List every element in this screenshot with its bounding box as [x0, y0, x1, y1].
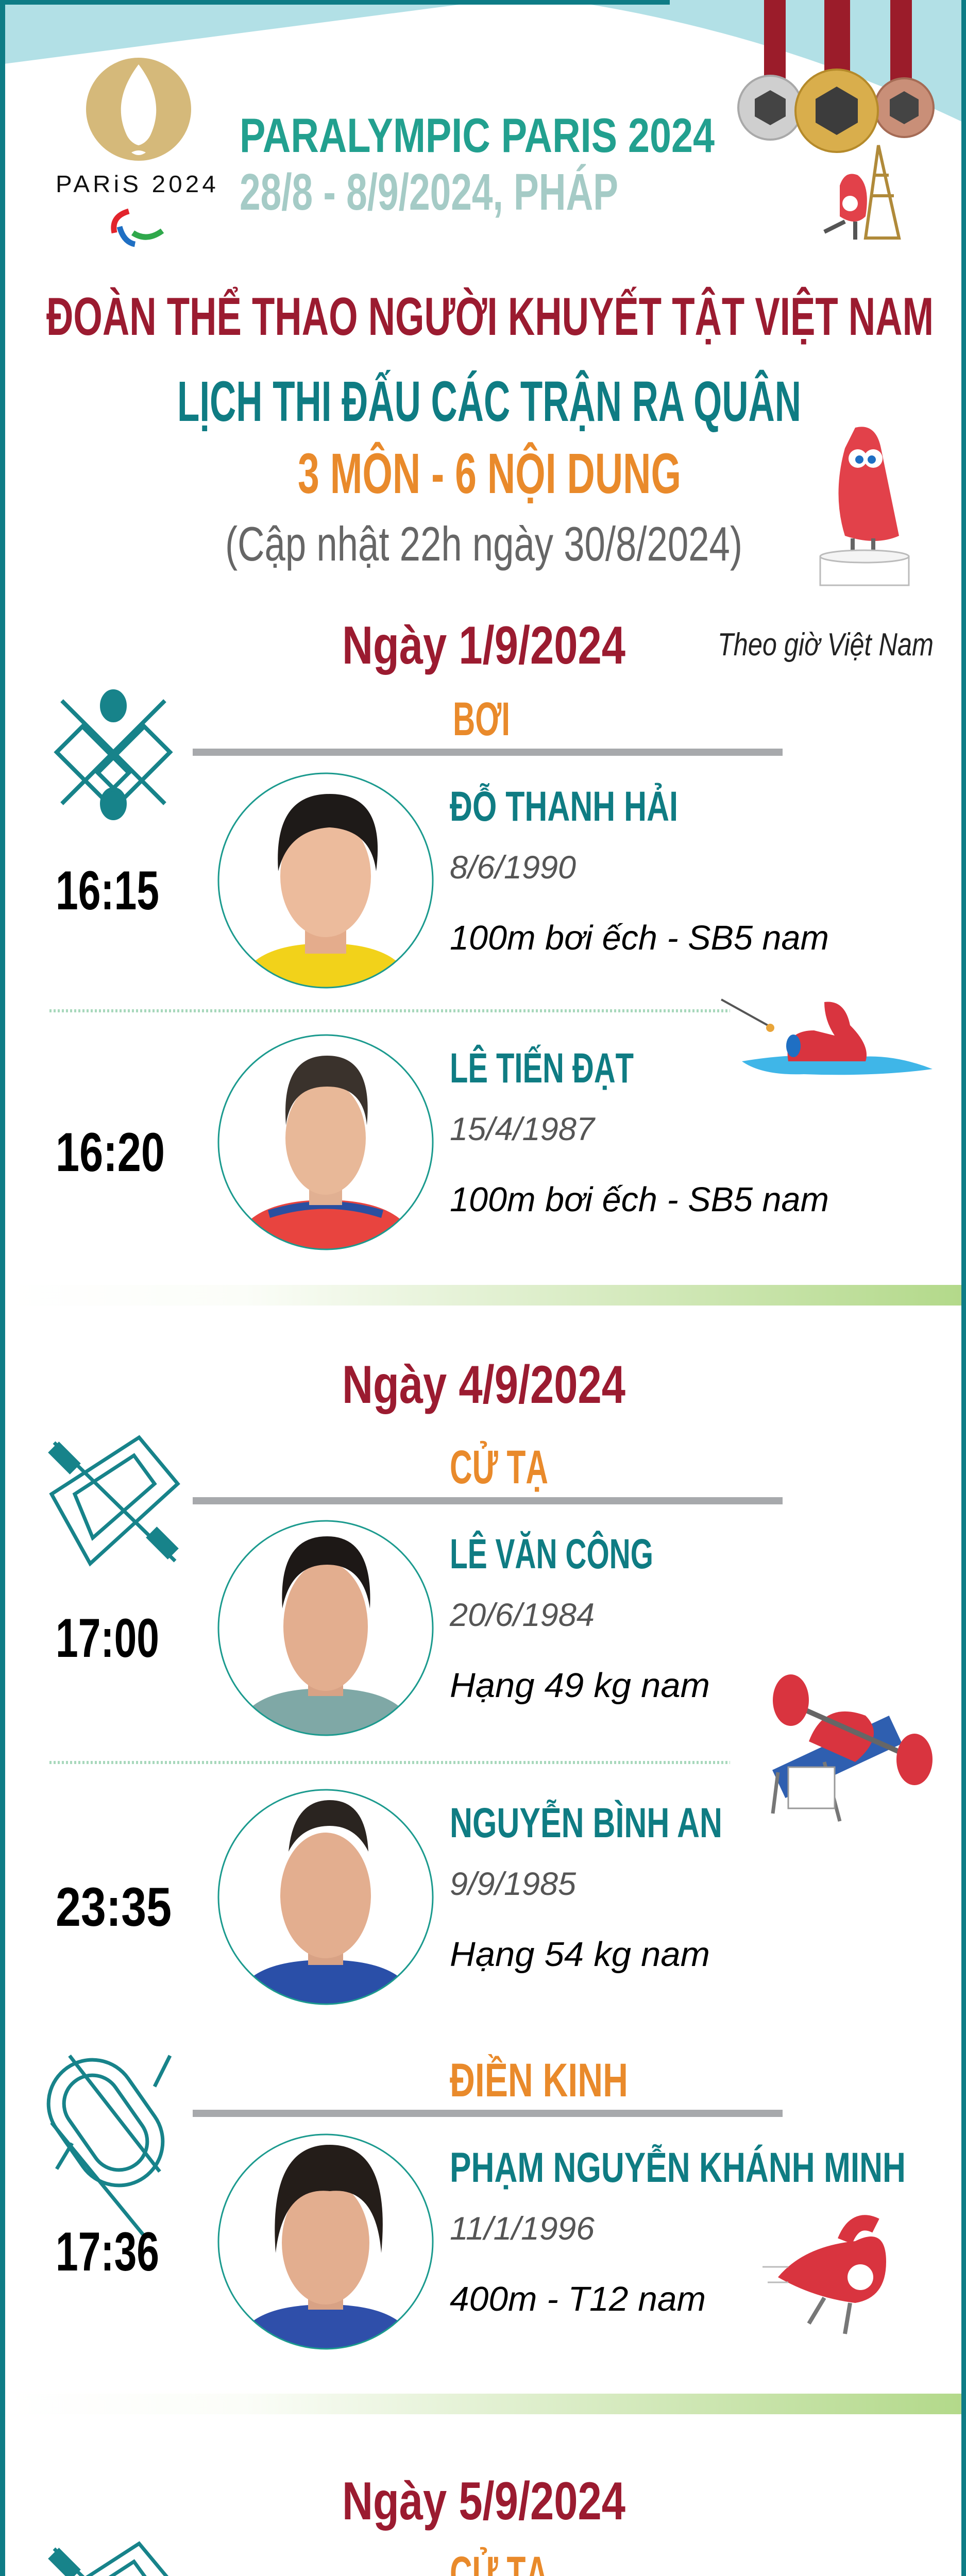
athlete: Le Tien Dat [56, 1035, 829, 1251]
sport: Dien kinh: ĐIỀN KINH [450, 2054, 628, 2107]
dates: 28/8 - 8/9/2024, PHÁP [240, 163, 618, 221]
icon: mascot on podium [820, 427, 909, 585]
athlete: Nguyen Binh An: NGUYỄN BÌNH AN [450, 1800, 722, 1846]
athlete: Pham Nguyen Khanh Minh: 400m - T12 nam [450, 2280, 706, 2318]
athlete: Le Tien Dat: 16:20 [56, 1121, 165, 1183]
athlete: Nguyen Binh An: 23:35 [56, 1876, 172, 1938]
athlete: Do Thanh Hai [56, 773, 829, 990]
athlete: Pham Nguyen Khanh Minh: 17:36 [56, 2221, 159, 2282]
athlete: Le Tien Dat: 15/4/1987 [450, 1111, 596, 1147]
icon: swimming mascot [721, 999, 933, 1075]
icon: athletics track [31, 2043, 180, 2236]
icon: weightlifting [48, 1437, 179, 1564]
subtitle: update time: (Cập nhật 22h ngày 30/8/2024) [225, 517, 742, 571]
icon: weightlifting [48, 2544, 179, 2576]
athlete: Le Tien Dat: LÊ TIẾN ĐẠT [450, 1044, 634, 1092]
icon: running mascot [762, 2223, 886, 2334]
sport: Cu ta: CỬ TẠ [450, 1440, 548, 1494]
athlete: Le Van Cong: LÊ VĂN CÔNG [450, 1530, 653, 1578]
athlete: Pham Nguyen Khanh Minh: 11/1/1996 [450, 2211, 595, 2247]
athlete: Do Thanh Hai: 8/6/1990 [450, 850, 576, 886]
athlete: Do Thanh Hai: 16:15 [56, 859, 159, 921]
athlete: Le Tien Dat: 100m bơi ếch - SB5 nam [450, 1180, 829, 1219]
athlete: Do Thanh Hai: 100m bơi ếch - SB5 nam [450, 919, 829, 957]
athlete: Nguyen Binh An [56, 1790, 722, 2006]
day heading: 5/9/2024: Ngày 5/9/2024 [342, 2471, 625, 2531]
icon: swimming [57, 691, 170, 818]
athlete: Nguyen Binh An: 9/9/1985 [450, 1866, 577, 1902]
athlete: Pham Nguyen Khanh Minh [56, 2134, 906, 2351]
icon: medals [738, 0, 934, 152]
day heading: 1/9/2024: Ngày 1/9/2024 [342, 616, 625, 675]
icon: mascot with Eiffel tower [824, 145, 899, 240]
logo: Paris 2024: PARiS 2024 [56, 171, 219, 197]
athlete: Le Van Cong: 17:00 [56, 1607, 159, 1669]
title: Paralympic Paris 2024: PARALYMPIC PARIS 2024 [240, 108, 715, 162]
top wave [0, 0, 966, 124]
day heading: 4/9/2024: Ngày 4/9/2024 [342, 1355, 625, 1415]
athlete: Le Van Cong: Hạng 49 kg nam [450, 1666, 710, 1705]
athlete: Do Thanh Hai: ĐỖ THANH HẢI [450, 783, 678, 830]
heading: 3 mon 6 noi dung: 3 MÔN - 6 NỘI DUNG [298, 442, 681, 505]
icon: weightlifting mascot [772, 1674, 933, 1821]
logo: Paris 2024 [56, 58, 219, 244]
athlete: Le Van Cong: 20/6/1984 [449, 1597, 595, 1633]
sport: Boi: BƠI [453, 693, 510, 745]
athlete: Nguyen Binh An: Hạng 54 kg nam [450, 1935, 710, 1974]
athlete: Le Van Cong [56, 1521, 710, 1737]
